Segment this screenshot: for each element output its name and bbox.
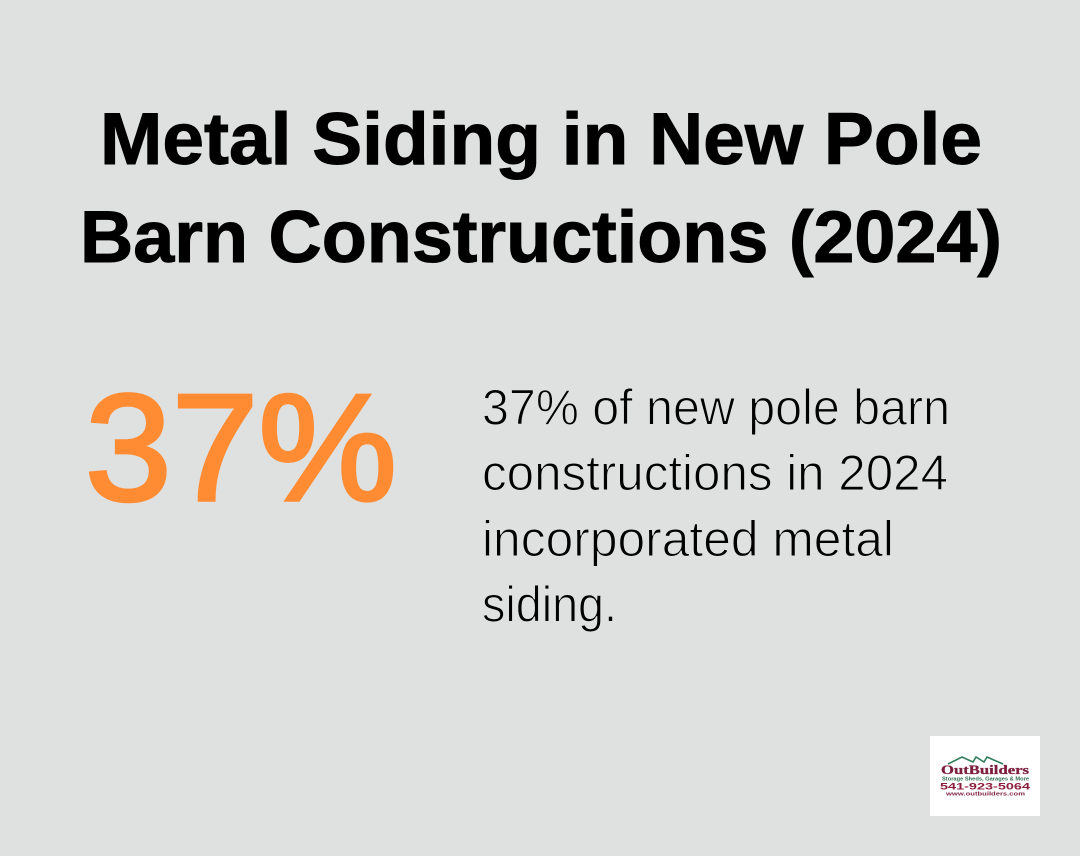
logo name: OutBuilders [941,762,1029,777]
title [80,99,1002,278]
description text: incorporated metal [482,511,894,567]
description text: constructions in 2024 [482,445,948,501]
description text: 37% of new pole barn [482,380,950,436]
description text [482,380,950,632]
description text: siding. [482,576,617,632]
logo tagline: Storage Sheds, Garages & More [942,776,1029,782]
logo url: www.outbuilders.com [945,792,1025,798]
icon: roof lines [948,757,1003,764]
big stat: 37%: 37% [85,363,397,533]
title: Metal Siding in New Pole [100,99,982,180]
title: Barn Constructions (2024) [80,197,1002,278]
logo phone: 541-923-5064 [940,782,1031,792]
logo: OutBuilders [930,736,1040,816]
